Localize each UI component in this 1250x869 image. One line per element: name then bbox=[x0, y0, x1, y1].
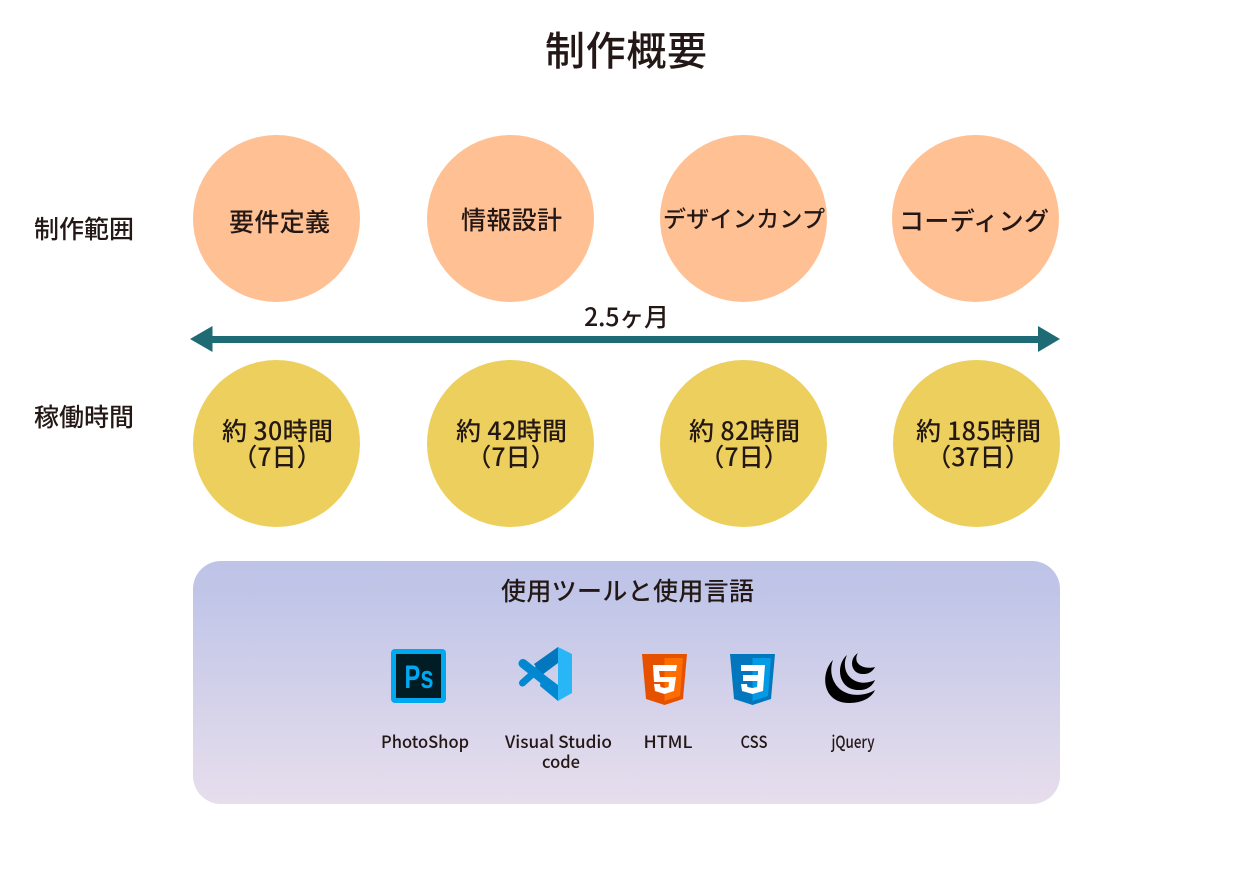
circle: 185 hours: 約 185時間 bbox=[916, 412, 1041, 448]
circle: 185 hours bbox=[893, 360, 1060, 527]
scope circles bbox=[193, 135, 1059, 302]
circle: coding: コーディング bbox=[899, 202, 1049, 238]
circle: 42 hours bbox=[427, 360, 594, 527]
icon: CSS3 bbox=[730, 654, 775, 705]
label: CSS: CSS bbox=[740, 728, 768, 753]
circle: design comp bbox=[660, 135, 827, 302]
panel: tools and languages bbox=[193, 561, 1060, 804]
panel heading: 使用ツールと使用言語 bbox=[501, 572, 754, 608]
duration double arrow bbox=[190, 326, 1060, 352]
row label: working hours: 稼働時間 bbox=[34, 398, 134, 434]
circle: design comp: デザインカンプ bbox=[663, 200, 825, 234]
circle: 30 hours: （7日） bbox=[232, 438, 322, 474]
icon: jQuery bbox=[825, 653, 875, 703]
circle: 82 hours: 約 82時間 bbox=[689, 412, 800, 448]
circle: 42 hours: （7日） bbox=[466, 438, 556, 474]
row label: scope: 制作範囲 bbox=[34, 210, 134, 246]
label: PhotoShop: PhotoShop bbox=[381, 728, 469, 753]
circle: 82 hours bbox=[660, 360, 827, 527]
label: Visual Studio code: Visual Studio bbox=[504, 728, 612, 753]
circle: information design bbox=[427, 135, 594, 302]
circle: 42 hours: 約 42時間 bbox=[456, 412, 567, 448]
circle: 30 hours bbox=[193, 360, 360, 527]
label: HTML: HTML bbox=[644, 728, 692, 753]
icon: Photoshop: Ps bbox=[404, 659, 434, 695]
circle: information design: 情報設計 bbox=[461, 201, 562, 237]
icon: Photoshop bbox=[391, 649, 446, 703]
label: Visual Studio code: code bbox=[542, 748, 580, 773]
icon: HTML5 bbox=[642, 654, 687, 705]
title: 制作概要 bbox=[545, 19, 707, 77]
circle: requirements: 要件定義 bbox=[229, 203, 330, 239]
circle: 185 hours: （37日） bbox=[926, 438, 1030, 474]
circle: 82 hours: （7日） bbox=[699, 438, 789, 474]
label: Visual Studio code bbox=[504, 728, 612, 773]
hours circles bbox=[193, 360, 1060, 527]
circle: coding bbox=[892, 135, 1059, 302]
duration label: 2.5ヶ月 bbox=[584, 298, 669, 334]
circle: 30 hours: 約 30時間 bbox=[222, 412, 333, 448]
icon: Visual Studio Code bbox=[522, 647, 572, 701]
circle: requirements bbox=[193, 135, 360, 302]
label: jQuery: jQuery bbox=[831, 728, 875, 753]
